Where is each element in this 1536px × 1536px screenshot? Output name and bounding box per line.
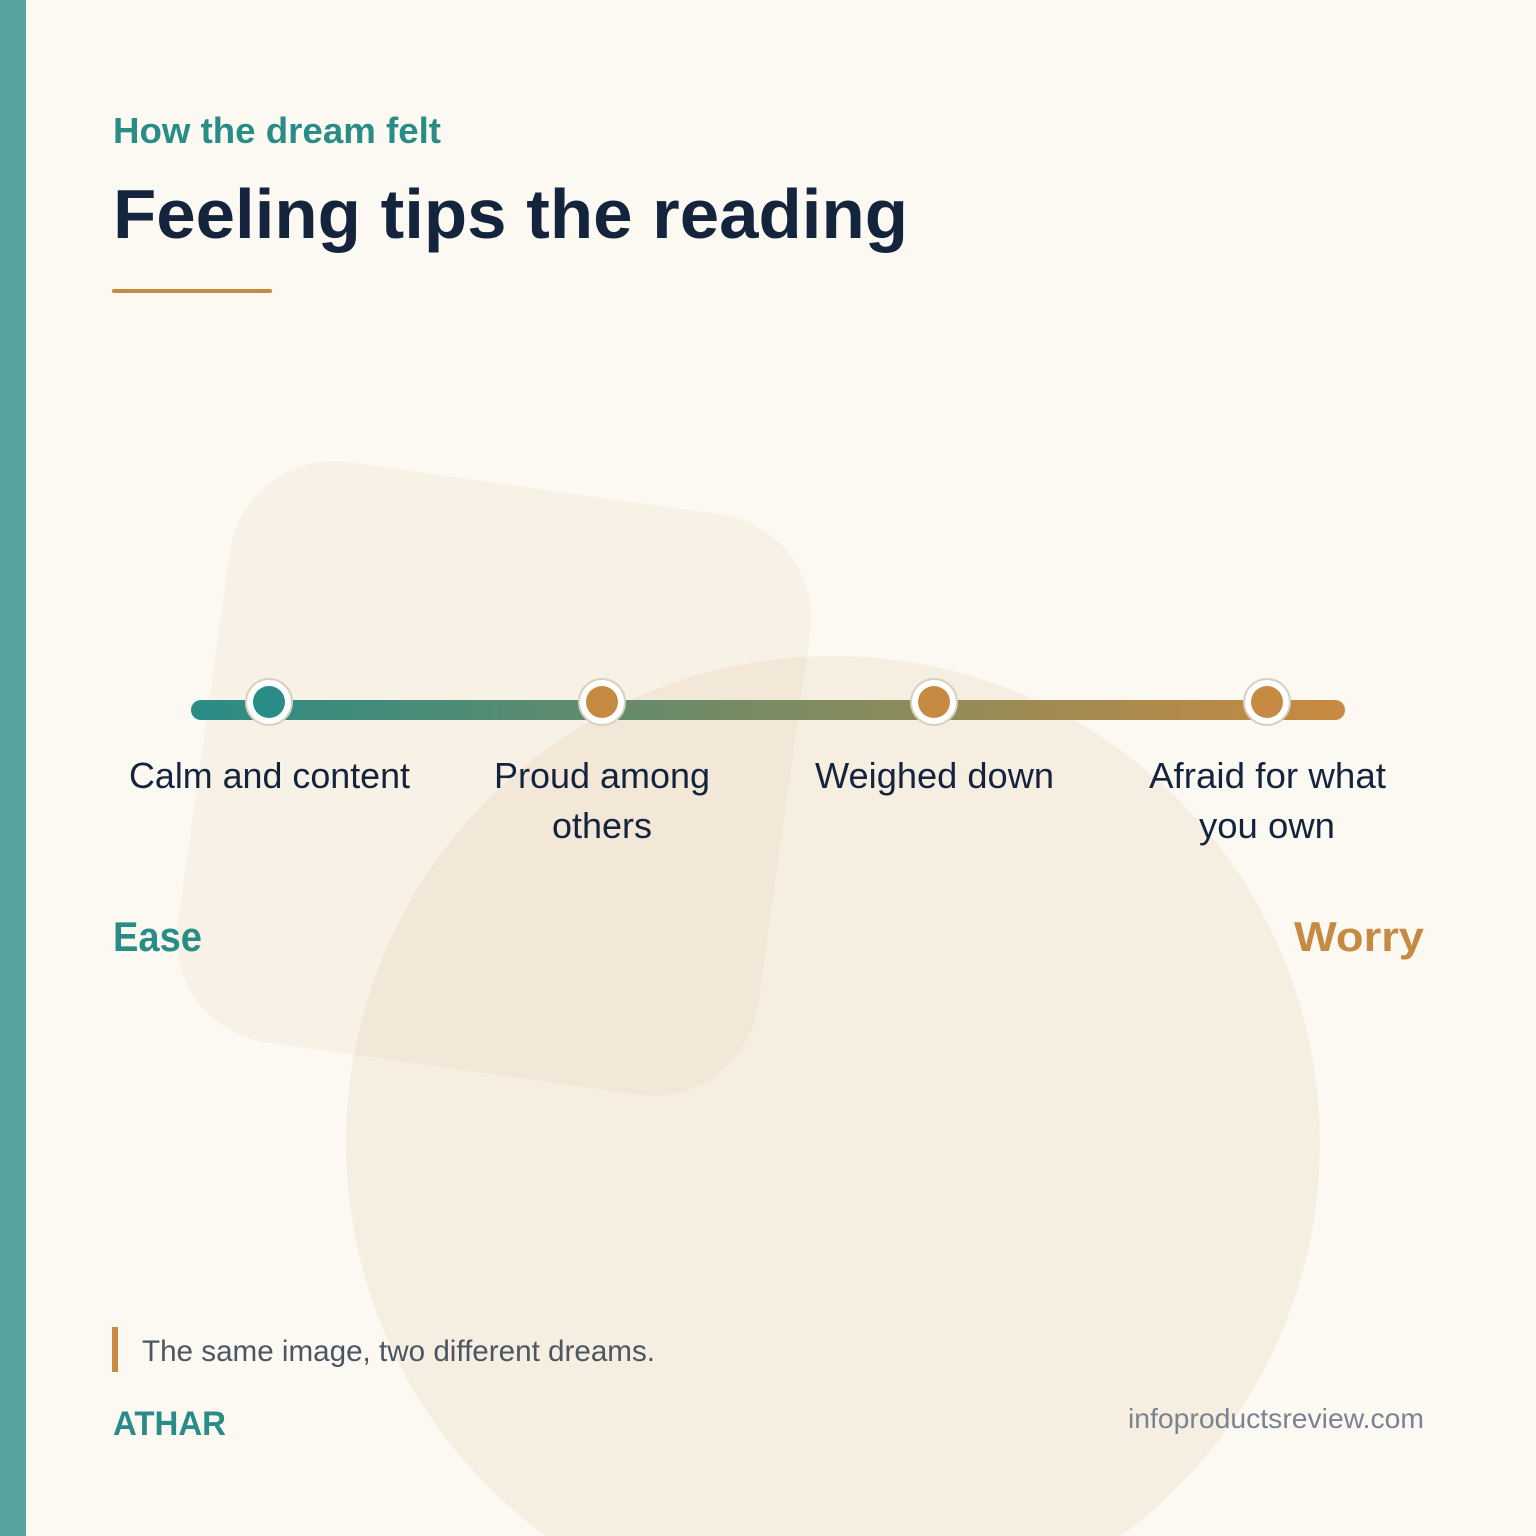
label: weighed down: Weighed down [815,755,1054,796]
label: afraid for what you own [1149,755,1386,846]
title underline [112,289,272,293]
title: Feeling tips the reading [113,175,908,253]
label: afraid for what you own: Afraid for what [1149,755,1386,796]
brand name: ATHAR [113,1405,226,1443]
eyebrow heading: How the dream felt [113,110,441,151]
background shape: circle [346,656,1320,1536]
scale end label: worry: Worry [1294,913,1425,960]
marker: afraid for what you own [1244,679,1290,725]
callout note: The same image, two different dreams. [142,1335,655,1368]
left accent stripe [0,0,26,1536]
marker: calm and content [246,679,292,725]
scale end label: ease: Ease [113,913,202,960]
callout note [112,1327,655,1372]
marker: weighed down [911,679,957,725]
label: calm and content: Calm and content [129,755,410,796]
website: infoproductsreview.com [1128,1403,1424,1434]
emotion scale [191,679,1345,725]
label: afraid for what you own: you own [1199,805,1335,846]
label: proud among others [494,755,710,846]
gradient track [191,700,1345,720]
marker: proud among others [579,679,625,725]
label: proud among others: Proud among [494,755,710,796]
background shape: rotated rounded square [163,448,825,1109]
label: proud among others: others [552,805,652,846]
